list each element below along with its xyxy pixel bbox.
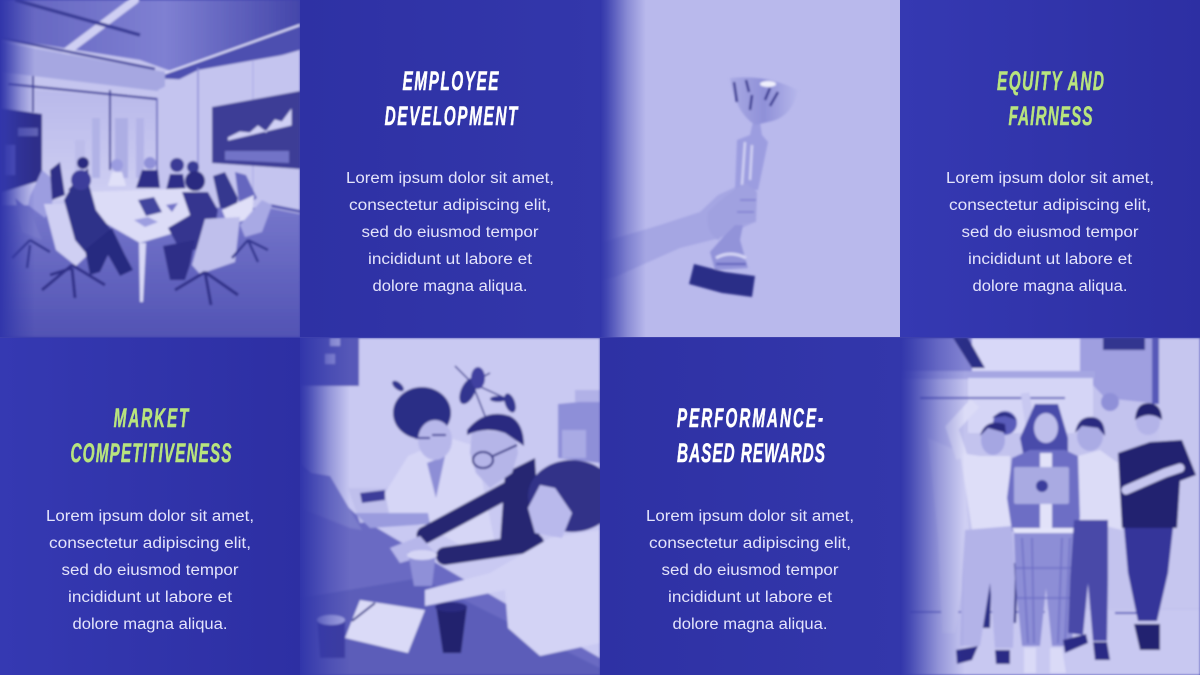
body text: employee development: incididunt ut labore et bbox=[368, 251, 533, 268]
heading: market competitiveness: COMPETITIVENESS bbox=[70, 438, 232, 468]
heading: equity and fairness: FAIRNESS bbox=[1008, 101, 1093, 131]
body text: employee development: dolore magna aliqua. bbox=[372, 278, 528, 295]
person: centre woman with laptop bbox=[1020, 404, 1068, 463]
photo: colleagues at a table bbox=[300, 338, 616, 675]
body text: equity and fairness: consectetur adipiscing elit, bbox=[949, 197, 1151, 214]
person left bbox=[385, 438, 495, 545]
near right man and chair bbox=[185, 171, 205, 191]
left people bbox=[28, 170, 54, 218]
left fade bbox=[600, 0, 646, 337]
body text: equity and fairness: dolore magna aliqua. bbox=[972, 278, 1128, 295]
body text: performance-based rewards bbox=[646, 508, 854, 633]
far side people bbox=[77, 157, 89, 169]
heading: performance-based rewards: BASED REWARDS bbox=[677, 438, 825, 468]
laptop bbox=[313, 474, 361, 530]
body text: employee development: Lorem ipsum dolor sit amet, bbox=[346, 170, 554, 187]
table bbox=[306, 508, 600, 669]
trophy base bbox=[689, 264, 755, 297]
paper bbox=[345, 600, 425, 653]
left fade bbox=[300, 338, 350, 675]
black cup bbox=[436, 606, 467, 653]
body text: performance-based rewards: Lorem ipsum dolor sit amet, bbox=[646, 508, 854, 525]
body text: market competitiveness: Lorem ipsum dolor sit amet, bbox=[46, 508, 254, 525]
small cup bbox=[317, 620, 345, 658]
body text: market competitiveness: sed do eiusmod tempor bbox=[62, 562, 238, 579]
heading: performance-based rewards bbox=[677, 403, 825, 468]
body text: market competitiveness: consectetur adipiscing elit, bbox=[49, 535, 251, 552]
ghost figure bbox=[940, 446, 968, 615]
panel: employee development bbox=[300, 0, 600, 337]
left fade bbox=[0, 0, 35, 337]
panel: performance-based rewards bbox=[600, 338, 900, 675]
body text: market competitiveness: dolore magna aliqua. bbox=[72, 616, 228, 633]
heading: employee development: DEVELOPMENT bbox=[385, 101, 519, 131]
heading: market competitiveness bbox=[70, 403, 232, 468]
body text: market competitiveness: incididunt ut labore et bbox=[68, 589, 233, 606]
body text: equity and fairness: incididunt ut labore et bbox=[968, 251, 1133, 268]
body text: performance-based rewards: sed do eiusmod tempor bbox=[662, 562, 838, 579]
heading: equity and fairness: EQUITY AND bbox=[997, 66, 1104, 96]
person right bbox=[425, 530, 600, 656]
body text: performance-based rewards: dolore magna aliqua. bbox=[672, 616, 828, 633]
photo: boardroom meeting bbox=[0, 0, 300, 337]
photo: hand holding trophy bbox=[600, 0, 900, 337]
trophy cup bbox=[730, 77, 798, 125]
body text: equity and fairness bbox=[946, 170, 1154, 295]
heading: equity and fairness bbox=[997, 66, 1104, 131]
person: left with raised arm bbox=[952, 403, 975, 458]
hand bbox=[718, 190, 758, 239]
body text: equity and fairness: sed do eiusmod tempor bbox=[962, 224, 1138, 241]
body text: performance-based rewards: consectetur adipiscing elit, bbox=[649, 535, 851, 552]
panel: equity and fairness bbox=[900, 0, 1200, 337]
trophy stem bbox=[735, 122, 768, 190]
body text: employee development: consectetur adipiscing elit, bbox=[349, 197, 551, 214]
heading: performance-based rewards: PERFORMANCE- bbox=[677, 403, 823, 433]
near left man and chair bbox=[44, 204, 93, 266]
plant bbox=[455, 366, 505, 416]
person: far right black shirt bbox=[1118, 440, 1196, 528]
heading: employee development bbox=[385, 66, 519, 131]
body text: employee development: sed do eiusmod tempor bbox=[362, 224, 538, 241]
body text: equity and fairness: Lorem ipsum dolor sit amet, bbox=[946, 170, 1154, 187]
arm bbox=[618, 188, 750, 274]
left chair bbox=[15, 198, 40, 238]
panel: market competitiveness bbox=[0, 338, 300, 675]
photo: team group with laptop bbox=[900, 338, 1200, 675]
laptop bbox=[1014, 467, 1069, 504]
person: right white shirt bbox=[1078, 450, 1122, 530]
left fade bbox=[900, 338, 965, 675]
body text: performance-based rewards: incididunt ut labore et bbox=[668, 589, 833, 606]
person middle bbox=[500, 458, 540, 543]
table bbox=[85, 188, 205, 243]
body text: employee development bbox=[346, 170, 554, 295]
person behind bbox=[993, 411, 1017, 435]
coffee cup bbox=[409, 557, 436, 588]
heading: employee development: EMPLOYEE bbox=[403, 66, 499, 96]
heading: market competitiveness: MARKET bbox=[114, 403, 190, 433]
body text: market competitiveness bbox=[46, 508, 254, 633]
